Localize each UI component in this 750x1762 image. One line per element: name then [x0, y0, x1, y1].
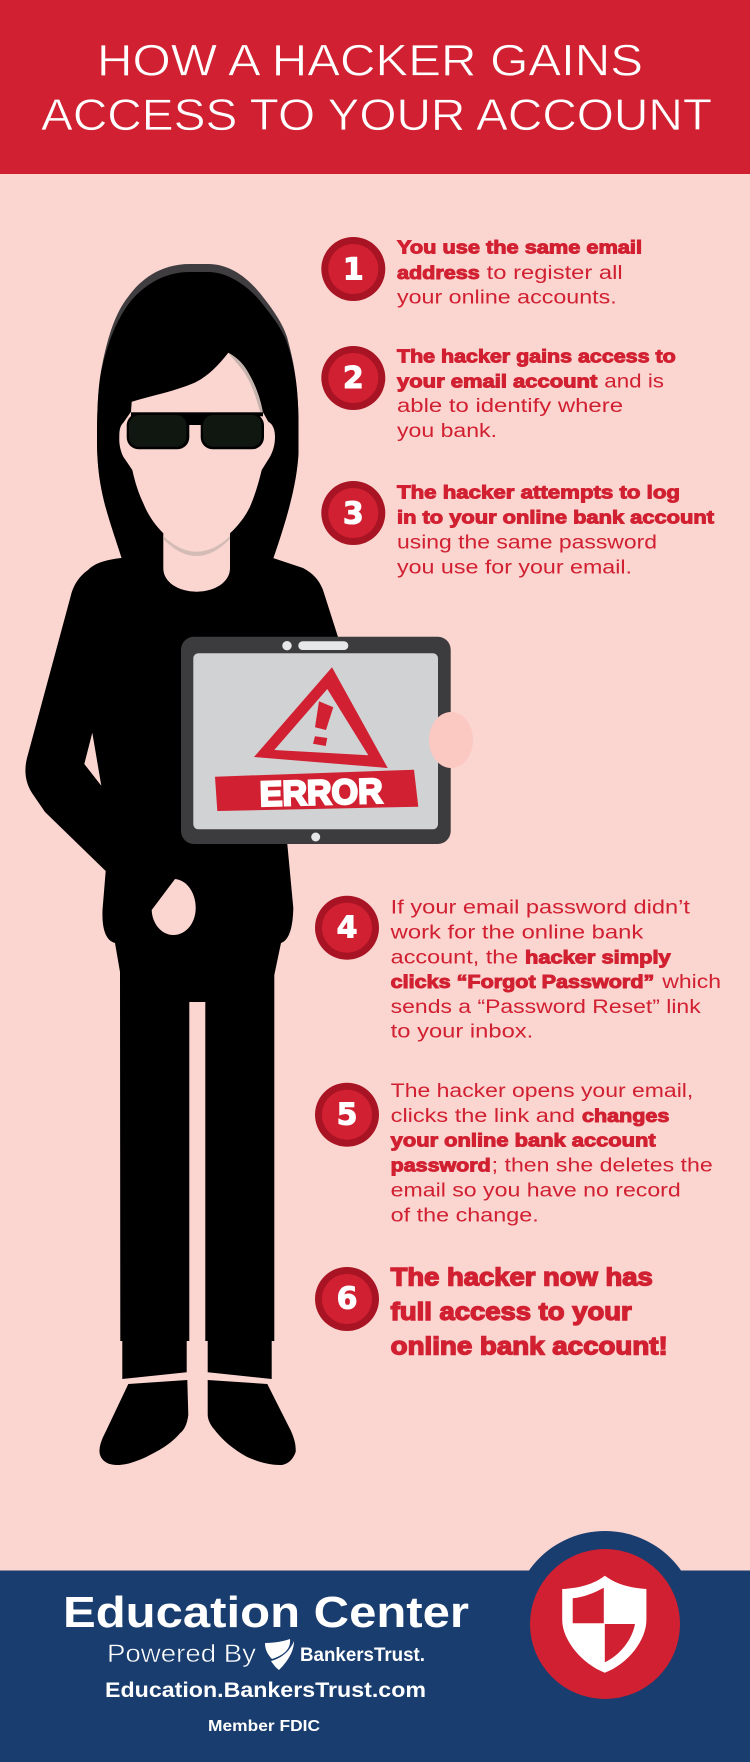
text 4: work for the online bank [389, 922, 644, 943]
thumb [429, 712, 473, 768]
left shoe [99, 1380, 188, 1465]
badge 5: 5 [337, 1098, 357, 1132]
badge 6 [315, 1267, 379, 1331]
step 1 [321, 236, 642, 308]
arm gap [84, 733, 101, 786]
face and neck [119, 353, 275, 592]
text 6: online bank account! [391, 1332, 668, 1360]
text 1 [397, 236, 642, 308]
text 5: changes [582, 1105, 669, 1126]
text 2: able to identify where [397, 396, 623, 417]
error label: ERROR [259, 772, 383, 814]
footer band [0, 1531, 750, 1762]
text 3: The hacker attempts to log [397, 481, 680, 502]
text 5: your online bank account [391, 1130, 656, 1151]
text 4: to your inbox. [391, 1022, 533, 1043]
badge 6: 6 [337, 1282, 357, 1316]
text 2: and is [604, 371, 664, 392]
step 3 [321, 481, 714, 578]
step 2 [321, 345, 676, 442]
text 4: If your email password didn’t [391, 897, 691, 918]
text 5: of the change. [391, 1205, 539, 1226]
badge 1 [321, 237, 385, 301]
tablet with error screen [181, 637, 473, 844]
website: Education.BankersTrust.com [105, 1679, 426, 1702]
error banner [215, 770, 418, 811]
tablet body [181, 637, 451, 844]
footer heading: Education Center [63, 1588, 469, 1637]
title: ACCESS TO YOUR ACCOUNT [41, 91, 712, 140]
tablet camera [282, 641, 292, 650]
text 4 [389, 897, 721, 1043]
badge 2: 2 [343, 361, 364, 396]
text 1: address [397, 262, 480, 283]
badge 1: 1 [343, 252, 364, 288]
text 5: email so you have no record [391, 1181, 681, 1202]
icon: bankers trust logo [265, 1639, 294, 1670]
step 6 [315, 1263, 668, 1360]
badge 4: 4 [337, 910, 357, 946]
body and legs [25, 558, 338, 1379]
tablet screen [193, 653, 438, 829]
exclamation mark [313, 701, 333, 746]
member fdic: Member FDIC [208, 1718, 320, 1735]
text 3: in to your online bank account [397, 506, 714, 527]
text 6: The hacker now has [391, 1263, 653, 1291]
tablet home button [311, 832, 320, 842]
right shoe [208, 1380, 296, 1465]
hair [97, 264, 298, 558]
text 5: The hacker opens your email, [391, 1081, 693, 1102]
bankers trust wordmark: BankersTrust. [300, 1644, 425, 1666]
badge 2 [321, 346, 385, 410]
tablet speaker [298, 641, 348, 650]
title [41, 36, 712, 140]
warning triangle [254, 667, 388, 768]
text 5: clicks the link and [391, 1106, 575, 1127]
badge 5 [315, 1083, 379, 1147]
text 3 [397, 481, 714, 578]
step 4 [315, 896, 721, 1043]
text 1: to register all [487, 263, 623, 284]
chin shadow [163, 536, 230, 556]
text 2 [397, 345, 676, 442]
text 4: hacker simply [525, 946, 672, 967]
illustration: hacker figure [25, 264, 338, 1465]
powered by: Powered By [107, 1640, 257, 1668]
step 5 [315, 1081, 713, 1226]
badge 3: 3 [343, 496, 364, 532]
text 1: You use the same email [397, 236, 642, 257]
text 4: clicks “Forgot Password” [391, 971, 654, 992]
badge 3 [321, 481, 385, 545]
shield emblem [530, 1549, 680, 1699]
text 5: password [391, 1155, 491, 1176]
text 2: you bank. [397, 421, 497, 442]
text 5 [391, 1081, 713, 1226]
text 2: your email account [397, 370, 597, 391]
text 4: account, the [391, 947, 518, 968]
text 5: ; then she deletes the [492, 1156, 713, 1177]
hand in pocket [152, 879, 196, 935]
text 4: sends a “Password Reset” link [391, 997, 701, 1018]
text 3: using the same password [397, 532, 657, 553]
forehead shadow [228, 353, 263, 412]
text 1: your online accounts. [397, 288, 617, 308]
text 3: you use for your email. [397, 557, 632, 578]
text 2: The hacker gains access to [397, 345, 676, 366]
badge 4 [315, 896, 379, 960]
sunglasses [127, 412, 264, 449]
text 6: full access to your [391, 1298, 632, 1326]
title: HOW A HACKER GAINS [97, 36, 643, 86]
header banner [0, 0, 750, 174]
text 4: which [661, 972, 721, 993]
text 6 [391, 1263, 668, 1360]
